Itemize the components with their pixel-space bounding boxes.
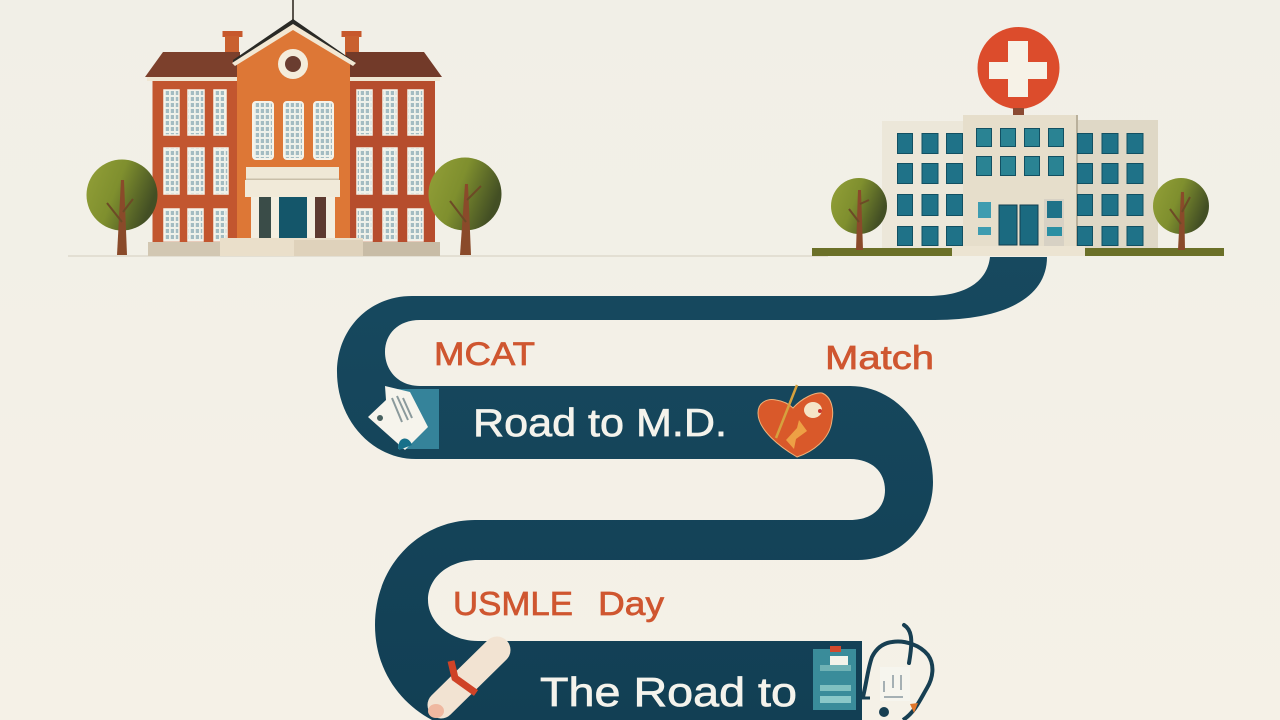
windows: hospital centre block (976, 128, 1064, 176)
road title: Road to M.D.: Road to M.D. (473, 402, 727, 445)
road title: The Road to: The Road to (540, 669, 797, 715)
tree: school left (86, 160, 158, 255)
icon: orange heart (758, 385, 833, 457)
hospital entrance (978, 199, 1064, 247)
icon: stethoscope (862, 625, 932, 720)
icon: diploma scroll (428, 650, 497, 718)
windows: left wing (164, 90, 228, 241)
tree: school right (428, 158, 502, 255)
icon: MCAT exam papers (368, 386, 439, 450)
winding road (337, 257, 1047, 720)
illustration: medical school building (145, 0, 442, 256)
illustration: hospital building (812, 27, 1224, 256)
tree: hospital right (1153, 178, 1209, 250)
windows: centre block (253, 102, 333, 159)
icon: clipboard (813, 646, 856, 710)
label: MCAT: MCAT (434, 336, 535, 372)
label: Match: Match (825, 339, 934, 376)
tree: hospital left (831, 178, 887, 250)
label: USMLE: USMLE (453, 585, 573, 622)
hospital sign: red cross (978, 27, 1060, 109)
windows: hospital left wing (898, 134, 962, 246)
windows: hospital right wing (1078, 134, 1143, 246)
label: Day: Day (598, 585, 665, 622)
ground line (68, 255, 828, 257)
portico (245, 167, 340, 239)
windows: right wing (357, 90, 423, 241)
